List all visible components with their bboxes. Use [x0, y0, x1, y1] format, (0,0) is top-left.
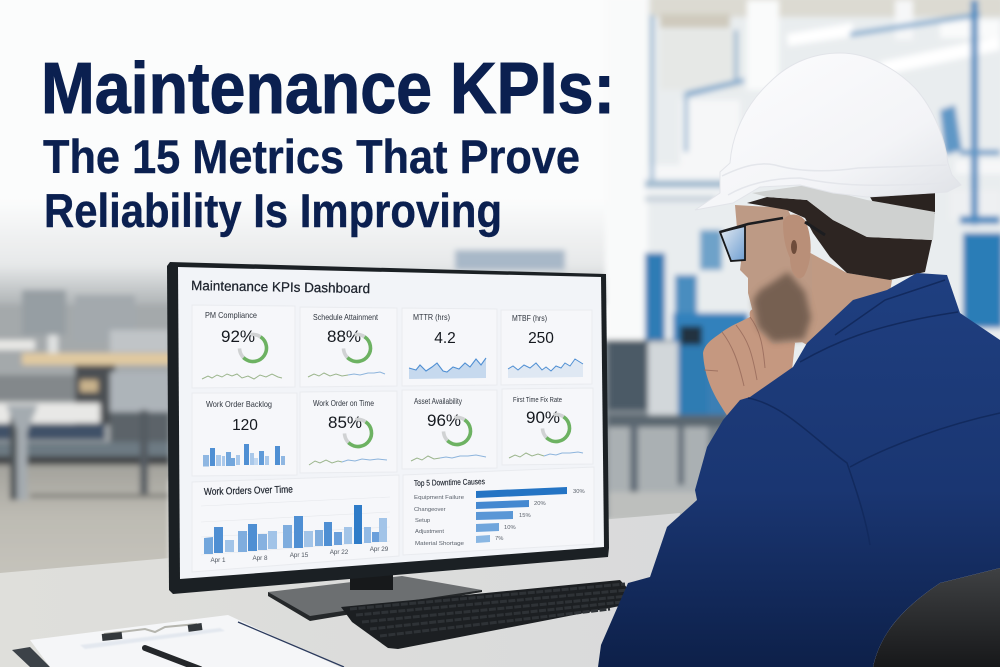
chart: Top 5 Downtime Causes — [414, 477, 585, 547]
worker — [598, 53, 1000, 667]
neck — [770, 250, 892, 345]
card: Work Order Backlog: 120 — [232, 417, 258, 434]
glasses — [720, 218, 825, 261]
card: First Time Fix Rate: 90% — [526, 408, 560, 427]
card: Schedule Attainment: Schedule Attainment — [313, 313, 379, 322]
card: MTTR: 4.2 — [434, 330, 456, 347]
chart: Work Orders Over Time: Apr 22 — [330, 549, 349, 556]
keyboard — [341, 580, 631, 649]
card: First Time Fix Rate — [509, 395, 583, 458]
clipboard — [12, 615, 344, 667]
face — [735, 205, 812, 344]
card: MTTR — [409, 313, 486, 379]
chart: Work Orders Over Time: Apr 15 — [290, 552, 309, 559]
hand — [703, 309, 795, 428]
chart: Top 5 Downtime Causes: Changeover — [414, 507, 446, 513]
card: Schedule Attainment — [308, 313, 385, 377]
card: Asset Availability: 96% — [427, 411, 461, 430]
card: Work Order Backlog: Work Order Backlog — [206, 399, 272, 409]
card: Work Order on Time: 85% — [328, 413, 362, 432]
card: PM Compliance: PM Compliance — [205, 310, 257, 320]
dashboard heading: Maintenance KPIs Dashboard — [191, 278, 370, 296]
monitor frame — [167, 262, 609, 594]
chart: Top 5 Downtime Causes: 10% — [504, 525, 516, 531]
chart: Top 5 Downtime Causes: Equipment Failure — [414, 495, 464, 501]
chart: Top 5 Downtime Causes: 30% — [573, 489, 585, 495]
background: factory right — [600, 0, 1000, 525]
card: PM Compliance: 92% — [221, 327, 255, 346]
card: MTTR: MTTR (hrs) — [413, 313, 450, 322]
card: Schedule Attainment: 88% — [327, 327, 361, 346]
hard hat — [695, 53, 961, 210]
chart: Work Orders Over Time: Apr 8 — [252, 555, 268, 562]
ear — [783, 214, 811, 278]
hard hat harness — [752, 185, 935, 240]
jacket seams — [748, 280, 1000, 545]
KPI cards background — [192, 305, 594, 572]
title — [41, 49, 615, 237]
chart: Work Orders Over Time: Apr 29 — [370, 546, 389, 553]
beard — [753, 272, 811, 342]
card: MTBF: 250 — [528, 330, 554, 347]
chart: Work Orders Over Time — [201, 485, 390, 564]
chart: Work Orders Over Time: Apr 1 — [210, 557, 226, 564]
chart: Work Orders Over Time: Work Orders Over Time — [204, 485, 293, 498]
chart: Top 5 Downtime Causes: 20% — [534, 501, 546, 507]
card: Asset Availability: Asset Availability — [414, 397, 462, 406]
card: MTBF — [508, 314, 583, 378]
jacket — [598, 273, 1000, 667]
title: Reliability Is Improving — [44, 184, 502, 237]
monitor stand — [268, 575, 482, 621]
chair — [873, 568, 1000, 667]
chart: Top 5 Downtime Causes: 7% — [495, 536, 503, 542]
chart: Top 5 Downtime Causes: Top 5 Downtime Causes — [414, 477, 485, 488]
card: Asset Availability — [411, 397, 486, 461]
title: Maintenance KPIs: — [41, 49, 615, 129]
chart: Top 5 Downtime Causes: 15% — [519, 513, 531, 519]
dashboard screen — [178, 267, 604, 579]
card: MTBF: MTBF (hrs) — [512, 314, 547, 323]
pen — [145, 648, 200, 667]
card: Work Order on Time: Work Order on Time — [313, 398, 374, 408]
card: Work Order on Time — [309, 398, 387, 465]
hair — [747, 197, 932, 280]
chart: Top 5 Downtime Causes: Adjustment — [415, 529, 444, 535]
chart: Top 5 Downtime Causes: Material Shortage — [415, 541, 464, 547]
title: The 15 Metrics That Prove — [43, 130, 580, 183]
background: factory left — [0, 0, 660, 667]
card: PM Compliance — [202, 310, 282, 379]
desk surface — [0, 513, 680, 667]
card: Work Order Backlog — [203, 399, 285, 466]
chart: Top 5 Downtime Causes: Setup — [415, 518, 430, 524]
card: First Time Fix Rate: First Time Fix Rate — [513, 395, 562, 404]
hat ridge — [722, 164, 947, 195]
